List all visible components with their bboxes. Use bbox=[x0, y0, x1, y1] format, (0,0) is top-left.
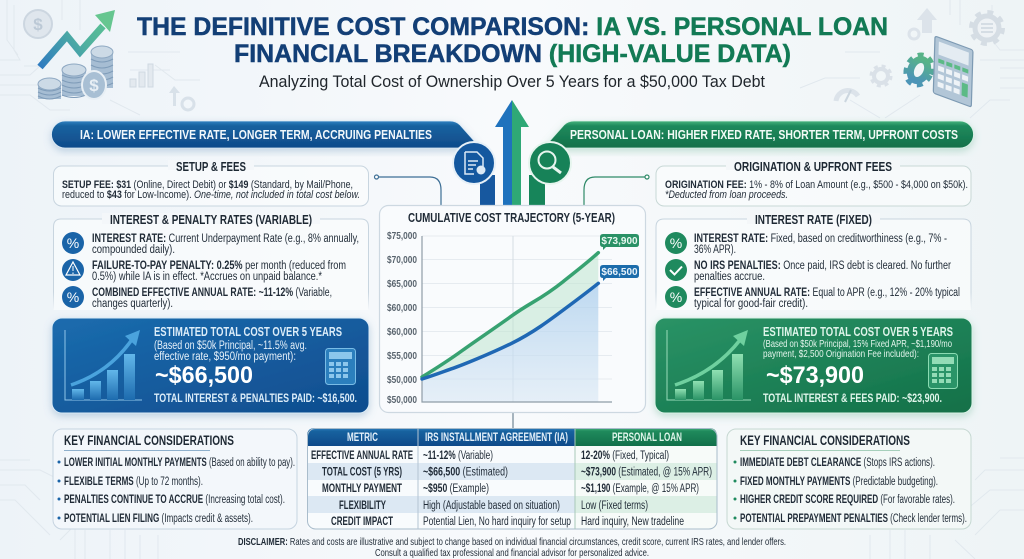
table rows: Low (Fixed terms) bbox=[581, 500, 648, 512]
panel: key considerations IA: LOWER INITIAL MONTHLY PAYMENTS (Based on ability to pay). bbox=[64, 457, 295, 469]
panel: origination fees: ORIGINATION FEE: 1% - 8% of Loan Amount (e.g., $500 - $4,000 on $50k). bbox=[665, 179, 968, 191]
chart title: CUMULATIVE COST TRAJECTORY (5-YEAR) bbox=[408, 211, 615, 225]
panel: interest and penalty rates bbox=[54, 212, 368, 310]
subtitle: Analyzing Total Cost of Ownership Over 5 Years for a $50,000 Tax Debt bbox=[259, 72, 765, 91]
line chart: cumulative cost trajectory bbox=[380, 206, 646, 412]
chart icon: rising bars bbox=[667, 330, 751, 400]
table rows: Potential Lien, No hard inquiry for setup bbox=[423, 516, 571, 528]
banner: IA: IA: LOWER EFFECTIVE RATE, LONGER TERM, ACCRUING PENALTIES bbox=[80, 127, 432, 142]
label: 73,900 bbox=[600, 234, 639, 250]
panel: setup and fees bbox=[54, 159, 368, 206]
panel: interest and penalty rates: compounded daily). bbox=[92, 244, 175, 256]
y axis labels: $55,000 bbox=[387, 351, 417, 362]
icon: percent bbox=[665, 286, 687, 308]
panel: personal loan estimated total cost: TOTAL INTEREST & FEES PAID: ~$23,900. bbox=[763, 393, 942, 405]
icon: coins and rising arrow: $ bbox=[33, 15, 43, 34]
table rows: MONTHLY PAYMENT bbox=[322, 483, 402, 495]
series: IA bbox=[422, 283, 598, 379]
panel: setup and fees: SETUP FEE: $31 (Online, Direct Debit) or $149 (Standard, by Mail/Phone, bbox=[62, 179, 353, 191]
panel: fixed interest rate: EFFECTIVE ANNUAL RATE: Equal to APR (e.g., 12% - 20% typical bbox=[694, 287, 960, 299]
icon: percent: % bbox=[67, 289, 79, 305]
icon: percent bbox=[62, 232, 84, 254]
heading: key considerations: KEY FINANCIAL CONSIDERATIONS bbox=[740, 433, 910, 448]
disclaimer: DISCLAIMER: Rates and costs are illustrative and subject to change based on individual financial circumstances, credit score, current IRS rates, and lender offers. bbox=[238, 536, 786, 548]
panel: interest and penalty rates: COMBINED EFFECTIVE ANNUAL RATE: ~11-12% (Variable, bbox=[92, 287, 332, 299]
table rows: ~$66,500 (Estimated) bbox=[423, 466, 508, 478]
panel: key considerations personal loan: POTENTIAL PREPAYMENT PENALTIES (Check lender terms). bbox=[740, 513, 967, 525]
panel: setup and fees: reduced to $43 for Low-Income). One-time, not included in total cost below. bbox=[62, 189, 360, 201]
icon: warning triangle bbox=[62, 259, 84, 281]
panel: fixed interest rate: penalties accrue. bbox=[694, 271, 765, 283]
table rows: CREDIT IMPACT bbox=[331, 516, 393, 528]
panel: key considerations IA: PENALTIES CONTINUE TO ACCRUE (Increasing total cost). bbox=[64, 494, 285, 506]
disclaimer: Consult a qualified tax professional and financial advisor for personalized advice. bbox=[375, 547, 649, 559]
label: 66,500 bbox=[600, 265, 639, 281]
panel: IA estimated total cost bbox=[52, 318, 369, 413]
panel: origination fees: *Deducted from loan proceeds. bbox=[665, 189, 788, 201]
table rows bbox=[311, 450, 712, 528]
central arrows bbox=[480, 100, 545, 205]
total cost figure: ~$73,900 bbox=[766, 362, 864, 389]
table header: PERSONAL LOAN bbox=[612, 432, 682, 444]
panel: interest and penalty rates: 0.5%) while IA is in effect. *Accrues on unpaid balance.* bbox=[92, 271, 322, 283]
table rows: 12-20% (Fixed, Typical) bbox=[581, 450, 669, 462]
y axis labels: $75,000 bbox=[387, 231, 417, 242]
title: FINANCIAL BREAKDOWN (HIGH-VALUE DATA) bbox=[234, 40, 791, 68]
icon: calculator bbox=[928, 354, 958, 388]
panel: interest and penalty rates: changes quarterly). bbox=[92, 298, 173, 310]
table header: IRS INSTALLMENT AGREEMENT (IA) bbox=[425, 432, 568, 444]
y axis labels bbox=[387, 231, 417, 406]
panel: key considerations IA bbox=[53, 429, 297, 529]
panel: IA estimated total cost: ESTIMATED TOTAL COST OVER 5 YEARS bbox=[154, 325, 342, 339]
title: THE DEFINITIVE COST COMPARISON: IA VS. PERSONAL LOAN bbox=[137, 13, 888, 41]
icon: percent: % bbox=[670, 289, 682, 305]
table rows: ~$950 (Example) bbox=[423, 483, 489, 495]
panel: personal loan estimated total cost: ESTIMATED TOTAL COST OVER 5 YEARS bbox=[763, 325, 953, 339]
table rows: FLEXIBILITY bbox=[339, 500, 386, 512]
panel: IA estimated total cost: (Based on $50k Principal, ~11.5% avg. bbox=[154, 340, 307, 352]
panel: personal loan estimated total cost bbox=[655, 318, 972, 413]
icon: document with gear bbox=[453, 142, 495, 184]
panel: key considerations personal loan bbox=[727, 429, 971, 529]
panel: personal loan estimated total cost: (Based on $50k Principal, 15% Fixed APR, ~$1,190/mo bbox=[763, 338, 952, 350]
title bbox=[137, 13, 888, 68]
y axis labels: $50,000 bbox=[387, 375, 417, 386]
banner: personal loan bbox=[548, 121, 974, 148]
heading: fixed interest rate: INTEREST RATE (FIXED) bbox=[755, 212, 872, 227]
table rows: ~11-12% (Variable) bbox=[423, 450, 493, 462]
table header bbox=[347, 432, 682, 444]
panel: origination fees bbox=[656, 159, 971, 206]
table rows: TOTAL COST (5 YRS) bbox=[322, 466, 402, 478]
series: personal loan bbox=[422, 253, 598, 377]
panel: key considerations personal loan: FIXED MONTHLY PAYMENTS (Predictable budgeting). bbox=[740, 476, 938, 488]
heading: origination fees: ORIGINATION & UPFRONT FEES bbox=[734, 159, 892, 174]
icon: magnifying glass bbox=[529, 142, 571, 184]
icon: coins and rising arrow: $ bbox=[89, 76, 99, 95]
y axis labels: $65,000 bbox=[387, 279, 417, 290]
icon: calculator bbox=[326, 348, 356, 384]
y axis labels: $60,000 bbox=[387, 327, 417, 338]
chart icon: rising bars bbox=[65, 330, 142, 400]
heading: setup and fees: SETUP & FEES bbox=[176, 159, 246, 174]
table header: METRIC bbox=[347, 432, 378, 444]
icon: percent: % bbox=[670, 235, 682, 251]
icon: percent bbox=[62, 286, 84, 308]
icon: calculator and gears bbox=[836, 8, 1003, 107]
disclaimer bbox=[238, 536, 786, 559]
table rows: ~$1,190 (Example, @ 15% APR) bbox=[581, 483, 699, 495]
table rows: Hard inquiry, New tradeline bbox=[581, 516, 684, 528]
y axis labels: $50,000 bbox=[387, 395, 417, 406]
panel: key considerations personal loan: HIGHER CREDIT SCORE REQUIRED (For favorable rates). bbox=[740, 494, 955, 506]
heading: interest and penalty rates: INTEREST & PENALTY RATES (VARIABLE) bbox=[110, 212, 312, 227]
panel: IA estimated total cost: effective rate, $950/mo payment): bbox=[154, 351, 296, 363]
banner: IA bbox=[52, 121, 476, 148]
icon: check mark bbox=[665, 259, 687, 281]
label: 66,500: $66,500 bbox=[601, 267, 638, 278]
panel: fixed interest rate: INTEREST RATE: Fixed, based on creditworthiness (e.g., 7% - bbox=[694, 233, 947, 245]
comparison table bbox=[307, 428, 717, 529]
heading: key considerations: KEY FINANCIAL CONSIDERATIONS bbox=[64, 433, 234, 448]
icon: percent bbox=[665, 232, 687, 254]
panel: key considerations IA: POTENTIAL LIEN FILING (Impacts credit & assets). bbox=[64, 513, 253, 525]
label: 73,900: $73,900 bbox=[601, 236, 638, 247]
panel: fixed interest rate bbox=[656, 212, 971, 310]
total cost figure: ~$66,500 bbox=[155, 362, 253, 389]
panel: IA estimated total cost: TOTAL INTEREST & PENALTIES PAID: ~$16,500. bbox=[154, 393, 357, 405]
panel: key considerations personal loan: IMMEDIATE DEBT CLEARANCE (Stops IRS actions). bbox=[740, 457, 935, 469]
icon: percent: % bbox=[67, 235, 79, 251]
panel: personal loan estimated total cost: payment, $2,500 Origination Fee included): bbox=[763, 348, 919, 360]
table rows: High (Adjustable based on situation) bbox=[423, 500, 560, 512]
table rows: EFFECTIVE ANNUAL RATE bbox=[311, 450, 413, 462]
table rows: ~$73,900 (Estimated, @ 15% APR) bbox=[581, 466, 712, 478]
panel: key considerations IA: FLEXIBLE TERMS (Up to 72 months). bbox=[64, 476, 203, 488]
connector lines bbox=[374, 175, 649, 428]
y axis labels: $70,000 bbox=[387, 255, 417, 266]
panel: fixed interest rate: typical for good-fair credit). bbox=[694, 298, 808, 310]
y axis labels: $60,000 bbox=[387, 303, 417, 314]
panel: interest and penalty rates: FAILURE-TO-PAY PENALTY: 0.25% per month (reduced from bbox=[92, 260, 346, 272]
icon: coins and rising arrow bbox=[24, 10, 194, 110]
panel: fixed interest rate: NO IRS PENALTIES: Once paid, IRS debt is cleared. No further bbox=[694, 260, 951, 272]
panel: interest and penalty rates: INTEREST RATE: Current Underpayment Rate (e.g., 8% annually, bbox=[92, 233, 359, 245]
panel: fixed interest rate: 36% APR). bbox=[694, 244, 736, 256]
